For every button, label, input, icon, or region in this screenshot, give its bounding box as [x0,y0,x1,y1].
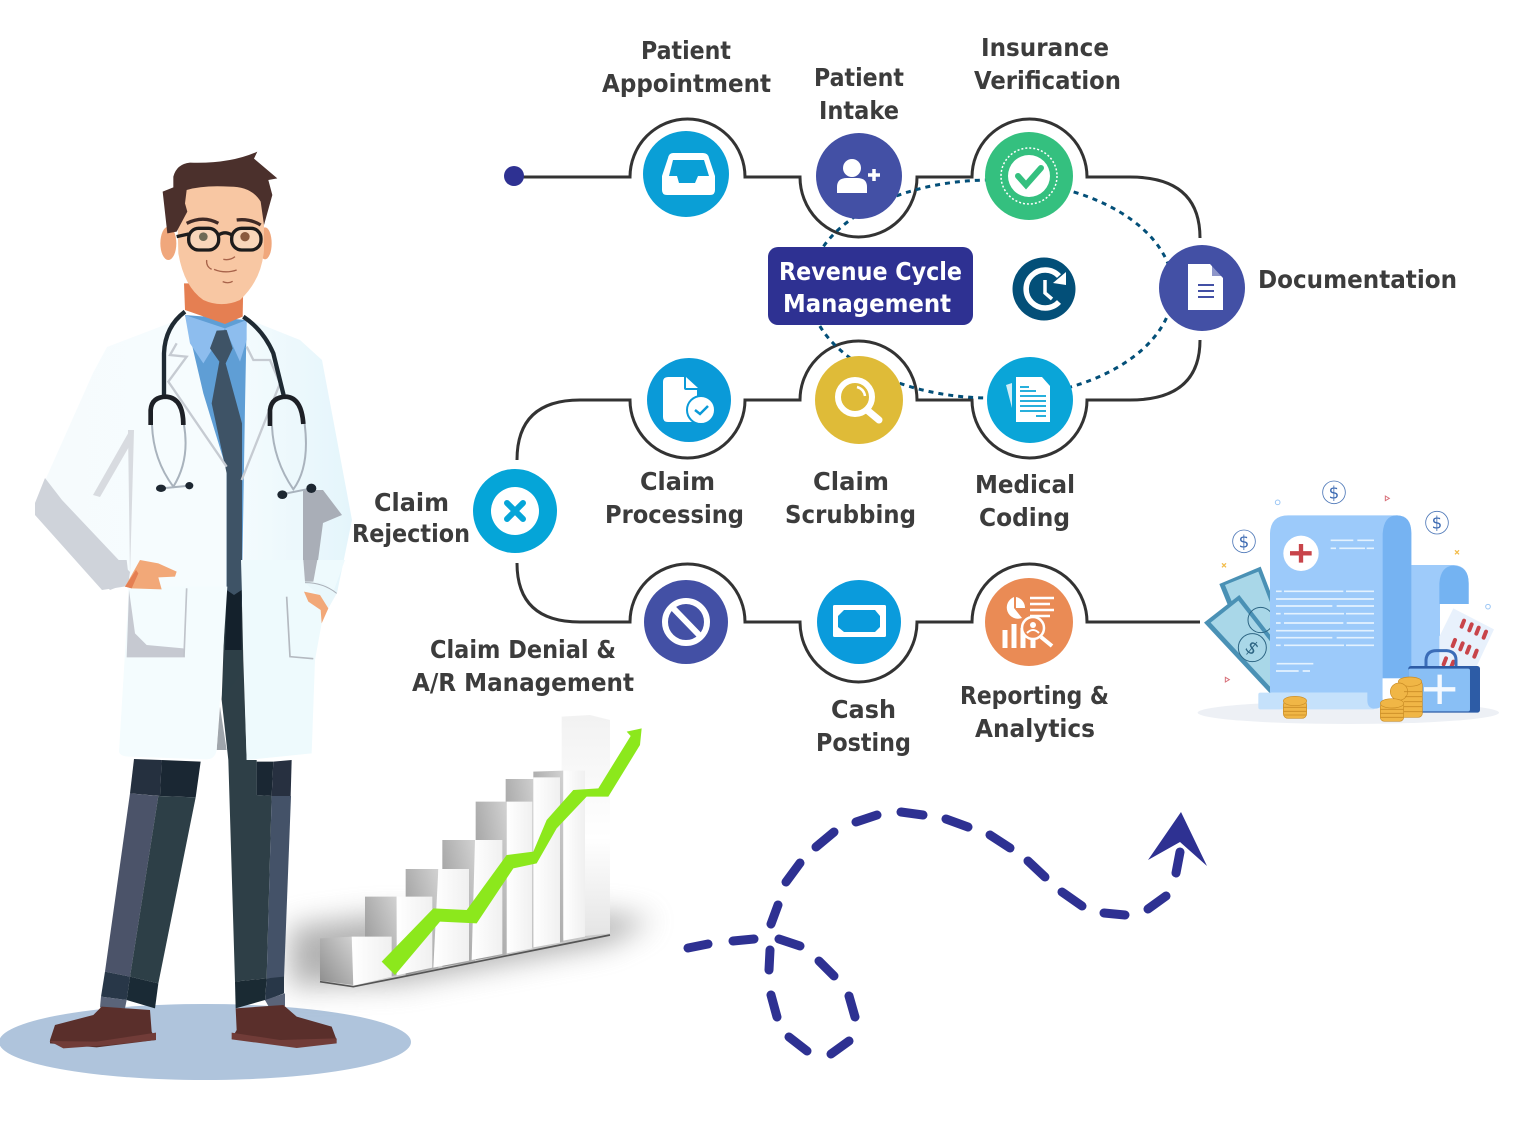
center label: Revenue Cycle Management: Revenue Cycle [779,257,962,286]
left hand [125,560,177,589]
left sleeve end [90,560,129,590]
right sleeve cuff [303,560,317,582]
ears [160,227,176,260]
step: Medical Coding: Medical [975,470,1075,499]
step: Medical Coding: Coding [979,503,1070,532]
shoes [49,1005,337,1048]
step: Cash Posting [816,580,911,757]
ground shadow [1198,701,1499,724]
step: Cash Posting: Cash [831,695,896,724]
step: Reporting and Analytics [960,578,1109,743]
banknotes [1204,567,1300,693]
doctor illustration [35,152,352,1048]
step: Claim Scrubbing [785,356,916,529]
pill pack [1439,608,1494,673]
banknotes: $ [1241,637,1263,660]
step: Medical Coding [975,357,1075,532]
step: Claim Rejection: Rejection [352,519,470,548]
bars [320,715,610,987]
dollar badges [1233,481,1448,553]
dashed looping arrow [688,812,1207,1054]
step: Claim Scrubbing: Claim [813,467,889,496]
step: Patient Intake [814,63,904,219]
stethoscope [151,312,312,494]
dotted cycle ellipse [809,180,1173,398]
trousers [100,560,292,1008]
start dot [504,166,524,186]
right hand [304,592,328,623]
chart shadow [290,913,653,987]
hair [163,152,277,233]
eyes [199,232,208,241]
step: Cash Posting: Posting [816,728,911,757]
step: Insurance Verification: Insurance [981,33,1109,62]
center label: Revenue Cycle Management: Management [783,289,951,318]
first aid kit [1408,651,1480,713]
green arrow [382,728,642,975]
center label: Revenue Cycle Management [768,247,973,325]
illustration: bar chart with green growth arrow [290,715,653,987]
shirt and tie [185,315,247,607]
step: Claim Processing [605,358,744,529]
coins [1283,677,1422,721]
step: Documentation: Documentation [1258,265,1457,294]
left pocket [127,590,185,657]
arrowhead [1148,812,1207,866]
right pocket [287,597,313,659]
process flow line [514,119,1200,682]
step: Reporting and Analytics: Analytics [975,714,1095,743]
step: Patient Intake: Intake [819,96,899,125]
step: Patient Intake: Patient [814,63,904,92]
step: Reporting and Analytics: Reporting & [960,681,1109,710]
step: Claim Denial and A/R Management [412,580,728,697]
step: Patient Appointment [602,36,771,217]
step: Claim Rejection: Claim [374,488,449,517]
white coat upper [35,318,352,608]
illustration: medical bill with money: $ [1432,514,1442,533]
step: Claim Scrubbing: Scrubbing [785,500,916,529]
illustration: medical bill with money: $ [1329,483,1339,502]
icon: clock cycle [1012,258,1076,320]
head, shirt, stethoscope detail [151,152,316,607]
bill base [1258,693,1375,709]
step: Claim Denial and A/R Management: Claim Denial & [430,635,616,664]
mouth and nose [207,257,237,283]
step: Claim Denial and A/R Management: A/R Management [412,668,634,697]
floor ellipse under doctor [0,1004,411,1080]
step: Patient Appointment: Patient [641,36,731,65]
glasses [177,228,261,250]
bill page [1270,515,1411,709]
neck [184,283,243,324]
step: Patient Appointment: Appointment [602,69,771,98]
brows [187,219,261,225]
step: Claim Rejection [352,469,557,553]
white coat lower panels [90,560,345,760]
face [177,183,264,304]
step: Claim Processing: Processing [605,500,744,529]
bill lines [1276,540,1374,671]
coat lapels [168,343,280,480]
illustration: medical bill with money: $ [1239,532,1249,551]
step: Documentation [1159,245,1457,331]
red cross badge [1283,536,1319,571]
confetti [1222,496,1490,682]
illustration: medical bill with money [1198,481,1499,724]
sleeve shadow [35,478,130,590]
step: Insurance Verification [974,33,1121,220]
bill scroll back [1410,565,1469,697]
step: Claim Processing: Claim [640,467,715,496]
step: Insurance Verification: Verification [974,66,1121,95]
